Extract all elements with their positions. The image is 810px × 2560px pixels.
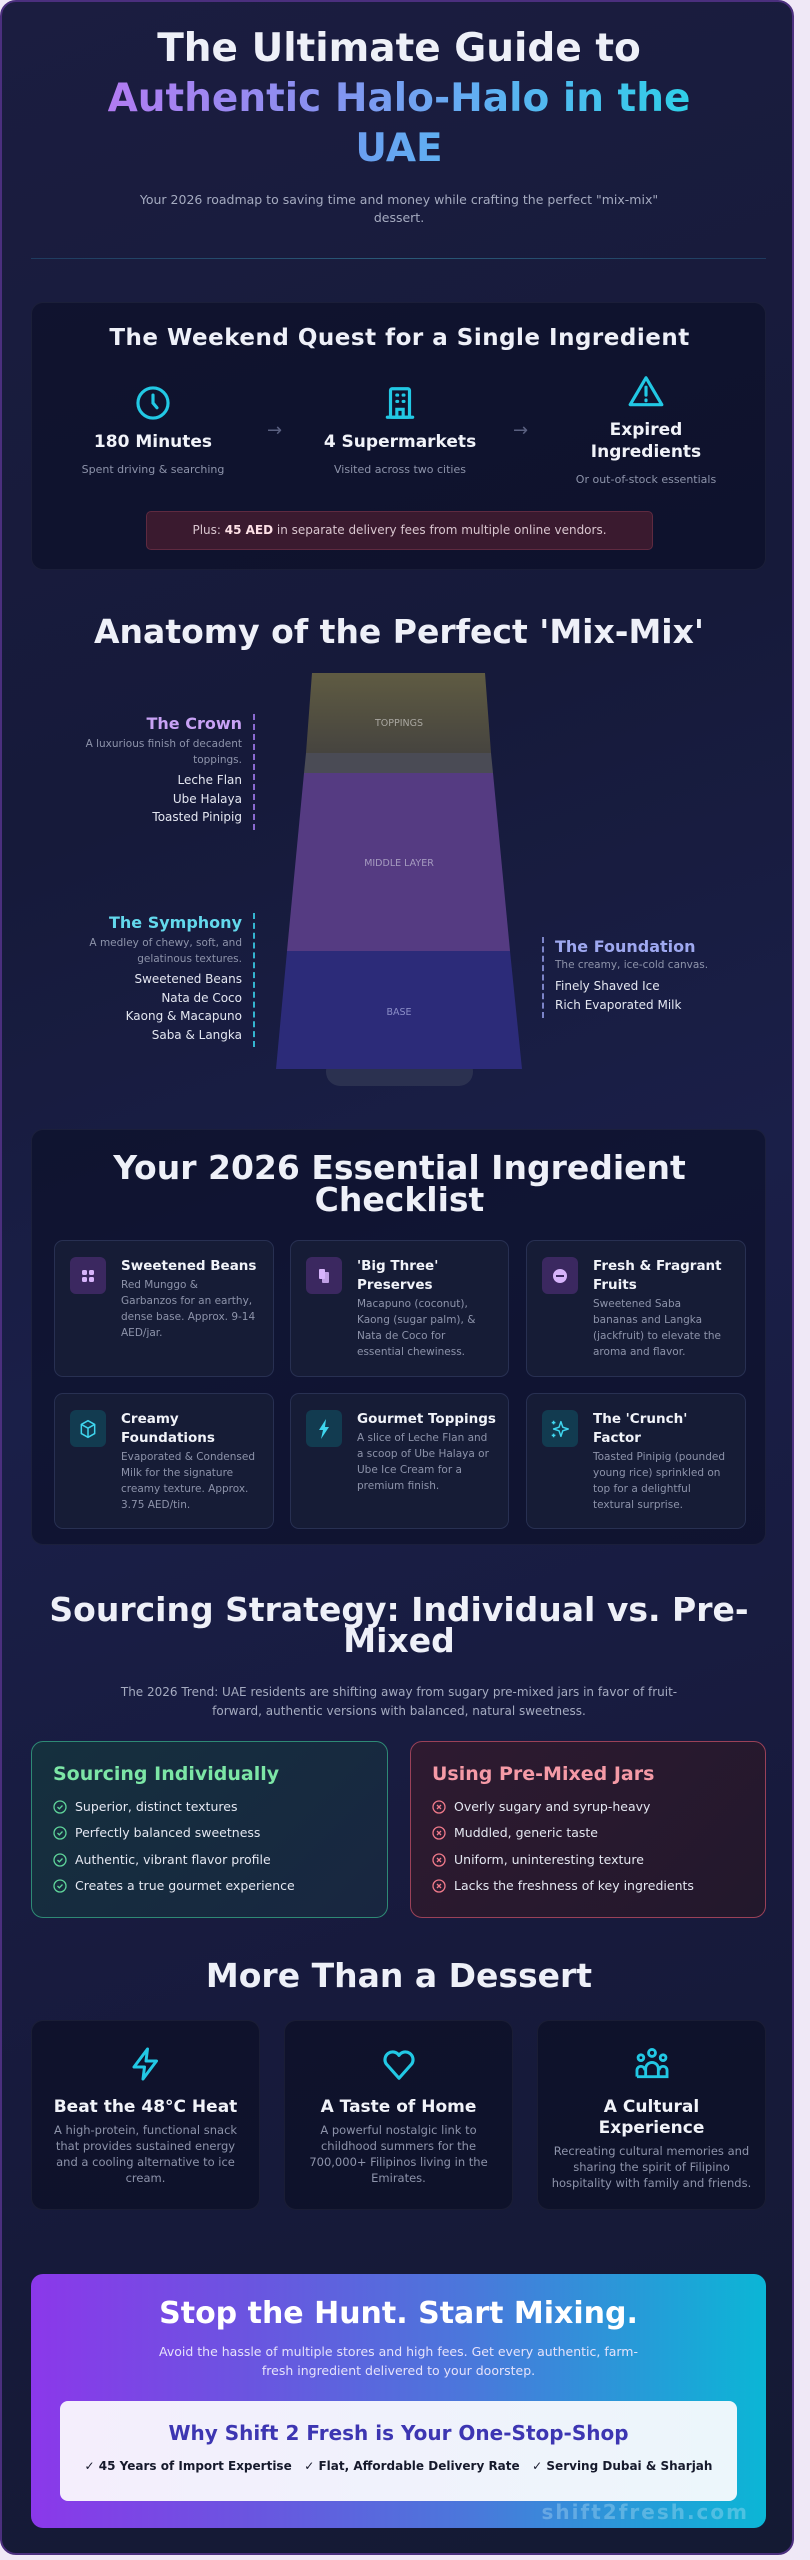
icon: box	[70, 1410, 106, 1447]
card: cultural experience: hospitality with family and friends.	[552, 2176, 751, 2190]
text block: the crown: A luxurious finish of decadent	[86, 738, 242, 750]
card: gourmet toppings: premium finish.	[357, 1480, 439, 1492]
stat: expired: Expired	[610, 420, 682, 440]
list: pros: Creates a true gourmet experience	[75, 1878, 295, 1893]
text block: the crown	[42, 714, 255, 830]
card: big three: essential chewiness.	[357, 1346, 465, 1358]
icon: jars	[306, 1257, 342, 1294]
stat: expired	[576, 376, 716, 486]
heading: checklist: Checklist	[315, 1180, 484, 1219]
stat: 180 minutes	[82, 386, 224, 476]
card: big three	[290, 1240, 509, 1377]
subtitle	[140, 192, 658, 225]
text block: the crown: Toasted Pinipig	[152, 810, 242, 824]
callout: one-stop-shop: Why Shift 2 Fresh is Your One-Stop-Shop	[168, 2421, 629, 2445]
panel: weekend quest	[31, 302, 766, 570]
list: cons: Lacks the freshness of key ingredients	[454, 1878, 694, 1893]
list: pros: Perfectly balanced sweetness	[75, 1825, 260, 1840]
card: taste of home: childhood summers for the	[321, 2139, 476, 2153]
heading: sourcing strategy	[49, 1590, 749, 1660]
list: pros: Authentic, vibrant flavor profile	[75, 1852, 271, 1867]
stat: 180 minutes: 180 Minutes	[94, 432, 212, 452]
card: heat	[31, 2020, 260, 2210]
card: big three: Preserves	[357, 1277, 433, 1293]
text block: the crown: The Crown	[146, 714, 242, 733]
list: cons: Overly sugary and syrup-heavy	[454, 1799, 650, 1814]
icon: clock	[136, 386, 170, 420]
card: taste of home: 700,000+ Filipinos living in the	[309, 2155, 488, 2169]
card: big three: Nata de Coco for	[357, 1330, 445, 1342]
card: big three: 'Big Three'	[357, 1258, 438, 1274]
title: UAE	[355, 126, 443, 171]
card: cultural experience: sharing the spirit of Filipino	[573, 2160, 730, 2174]
chart: halo-halo cup: TOPPINGS	[374, 718, 423, 729]
text block: the foundation: The creamy, ice-cold canvas.	[555, 959, 708, 971]
heading: sourcing strategy: Mixed	[343, 1621, 455, 1660]
chart: halo-halo cup: MIDDLE LAYER	[364, 858, 434, 869]
card: taste of home: Emirates.	[371, 2171, 426, 2185]
card: cultural experience: Recreating cultural memories and	[554, 2144, 749, 2158]
card: taste of home: A Taste of Home	[321, 2097, 476, 2117]
card: fresh fruits	[526, 1240, 746, 1377]
icon: bolt	[306, 1410, 342, 1447]
text block: trend: forward, authentic versions with balanced, natural sweetness.	[212, 1704, 586, 1718]
title: The Ultimate Guide to	[157, 26, 641, 71]
text block: the crown: toppings.	[193, 754, 242, 766]
card: fresh fruits: bananas and Langka	[593, 1314, 702, 1326]
card: heat: A high-protein, functional snack	[54, 2123, 237, 2137]
heading: more than a dessert: More Than a Dessert	[206, 1956, 592, 1995]
card: gourmet toppings: A slice of Leche Flan and	[357, 1432, 487, 1444]
stat: 4 supermarkets	[324, 387, 476, 476]
text block: the symphony: gelatinous textures.	[137, 953, 242, 965]
card: gourmet toppings: Ube Ice Cream for a	[357, 1464, 462, 1476]
stat: expired: Ingredients	[591, 442, 701, 462]
arrow: →	[513, 420, 528, 441]
card: big three: Macapuno (coconut),	[357, 1298, 468, 1310]
icon: grid	[70, 1257, 106, 1294]
icon: building	[386, 387, 414, 419]
card: sweetened beans: AED/jar.	[121, 1327, 162, 1339]
list: cons	[432, 1799, 694, 1893]
card: taste of home: A powerful nostalgic link to	[320, 2123, 477, 2137]
title: Authentic Halo-Halo in the	[108, 76, 690, 121]
heading: weekend quest: The Weekend Quest for a Single Ingredient	[109, 325, 690, 351]
card: creamy: Milk for the signature	[121, 1467, 233, 1479]
text block: trend	[120, 1685, 677, 1718]
text block: cta sub: fresh ingredient delivered to your doorstep.	[262, 2363, 535, 2378]
panel: checklist	[31, 1129, 766, 1545]
card: crunch: Factor	[593, 1430, 641, 1446]
text block: the crown: Ube Halaya	[173, 792, 242, 806]
heading: checklist: Your 2026 Essential Ingredient	[113, 1148, 686, 1187]
text block: the foundation: Rich Evaporated Milk	[555, 998, 681, 1012]
title	[108, 26, 690, 171]
list: pros: Superior, distinct textures	[75, 1799, 237, 1814]
text block: the symphony: Sweetened Beans	[134, 972, 242, 986]
card: fresh fruits: (jackfruit) to elevate the	[593, 1330, 721, 1342]
card: fresh fruits: Sweetened Saba	[593, 1298, 681, 1310]
card: sweetened beans: Red Munggo &	[121, 1279, 198, 1291]
stat: 4 supermarkets: Visited across two cities	[334, 463, 466, 476]
card: sweetened beans: dense base. Approx. 9-14	[121, 1311, 255, 1323]
card: heat: Beat the 48°C Heat	[54, 2097, 237, 2117]
heading: Using Pre-Mixed Jars	[432, 1763, 654, 1785]
card: gourmet toppings	[290, 1393, 509, 1529]
card: sweetened beans: Sweetened Beans	[121, 1258, 256, 1274]
arrow: →	[267, 420, 282, 441]
card: fresh fruits: Fruits	[593, 1277, 637, 1293]
card: cultural experience: A Cultural	[604, 2097, 699, 2117]
card: crunch: top for a delightful	[593, 1483, 691, 1495]
card: creamy: Creamy	[121, 1411, 179, 1427]
card: creamy: creamy texture. Approx.	[121, 1483, 248, 1495]
icon: bolt	[132, 2048, 158, 2080]
chart: halo-halo cup: BASE	[386, 1007, 412, 1018]
chart: halo-halo cup	[276, 673, 522, 1086]
text block: cta sub: Avoid the hassle of multiple stores and high fees. Get every authentic, farm-	[159, 2344, 638, 2359]
stat: expired: Or out-of-stock essentials	[576, 473, 716, 486]
panel: pre-mixed jars	[410, 1741, 766, 1918]
card: crunch: young rice) sprinkled on	[593, 1467, 720, 1479]
card: heat: that provides sustained energy	[56, 2139, 235, 2153]
card: crunch	[526, 1393, 746, 1529]
card: taste of home	[284, 2020, 513, 2210]
text block: the symphony: Kaong & Macapuno	[126, 1009, 242, 1023]
card: heat: cream.	[126, 2171, 165, 2185]
callout: one-stop-shop: ✓ 45 Years of Import Expertise ✓ Flat, Affordable Delivery Rate ✓ Serving Dubai & Sharjah	[85, 2459, 712, 2473]
card: fresh fruits: aroma and flavor.	[593, 1346, 685, 1358]
heading: sourcing strategy: Sourcing Strategy: Individual vs. Pre-	[49, 1590, 749, 1629]
card: creamy: Evaporated & Condensed	[121, 1451, 255, 1463]
subtitle: dessert.	[374, 210, 424, 225]
stat: 4 supermarkets: 4 Supermarkets	[324, 432, 476, 452]
card: creamy: Foundations	[121, 1430, 215, 1446]
card: fresh fruits: Fresh & Fragrant	[593, 1258, 722, 1274]
callout: one-stop-shop	[60, 2401, 737, 2501]
callout: delivery fees: Plus: 45 AED in separate delivery fees from multiple online vendors.	[192, 523, 607, 537]
heading: checklist	[113, 1148, 686, 1219]
text block: the symphony: Nata de Coco	[161, 991, 242, 1005]
card: cultural experience: Experience	[599, 2118, 704, 2138]
text block: the foundation: The Foundation	[555, 937, 696, 956]
text block: the symphony: The Symphony	[109, 913, 242, 932]
text block: the crown: Leche Flan	[178, 773, 242, 787]
icon: fruit	[542, 1257, 578, 1294]
card: crunch: The 'Crunch'	[593, 1411, 687, 1427]
icon: people	[636, 2048, 668, 2078]
card: crunch: textural surprise.	[593, 1499, 683, 1511]
card: gourmet toppings: a scoop of Ube Halaya or	[357, 1448, 489, 1460]
text block: the symphony: A medley of chewy, soft, and	[89, 937, 242, 949]
card: sweetened beans	[54, 1240, 274, 1377]
card: cultural experience	[537, 2020, 766, 2210]
list: cons: Muddled, generic taste	[454, 1825, 598, 1840]
heading: Sourcing Individually	[53, 1763, 279, 1785]
text block: the symphony	[42, 913, 255, 1047]
card: gourmet toppings: Gourmet Toppings	[357, 1411, 496, 1427]
list: pros	[53, 1799, 295, 1893]
text block: trend: The 2026 Trend: UAE residents are shifting away from sugary pre-mixed jars in favor of fruit-	[121, 1685, 677, 1699]
callout: delivery fees	[146, 511, 653, 550]
icon: sparkle	[542, 1410, 578, 1447]
panel: call to action	[31, 2274, 766, 2528]
icon: heart	[383, 2050, 415, 2080]
list: cons: Uniform, uninteresting texture	[454, 1852, 644, 1867]
watermark: shift2fresh.com	[542, 2500, 749, 2524]
card: sweetened beans: Garbanzos for an earthy,	[121, 1295, 252, 1307]
text block: the foundation: Finely Shaved Ice	[555, 979, 660, 993]
text block: the symphony: Saba & Langka	[152, 1028, 242, 1042]
card: creamy: 3.75 AED/tin.	[121, 1499, 190, 1511]
card: big three: Kaong (sugar palm), &	[357, 1314, 475, 1326]
heading: anatomy: Anatomy of the Perfect 'Mix-Mix'	[94, 612, 704, 651]
text block: cta sub	[159, 2344, 638, 2378]
card: crunch: Toasted Pinipig (pounded	[593, 1451, 725, 1463]
heading: cta: Stop the Hunt. Start Mixing.	[159, 2296, 638, 2331]
panel: sourcing individually	[31, 1741, 388, 1918]
stat: 180 minutes: Spent driving & searching	[82, 463, 224, 476]
card: creamy	[54, 1393, 274, 1529]
card: heat: and a cooling alternative to ice	[56, 2155, 235, 2169]
subtitle: Your 2026 roadmap to saving time and money while crafting the perfect "mix-mix"	[140, 192, 658, 207]
text block: the foundation	[542, 937, 762, 1018]
icon: warning	[628, 376, 664, 406]
